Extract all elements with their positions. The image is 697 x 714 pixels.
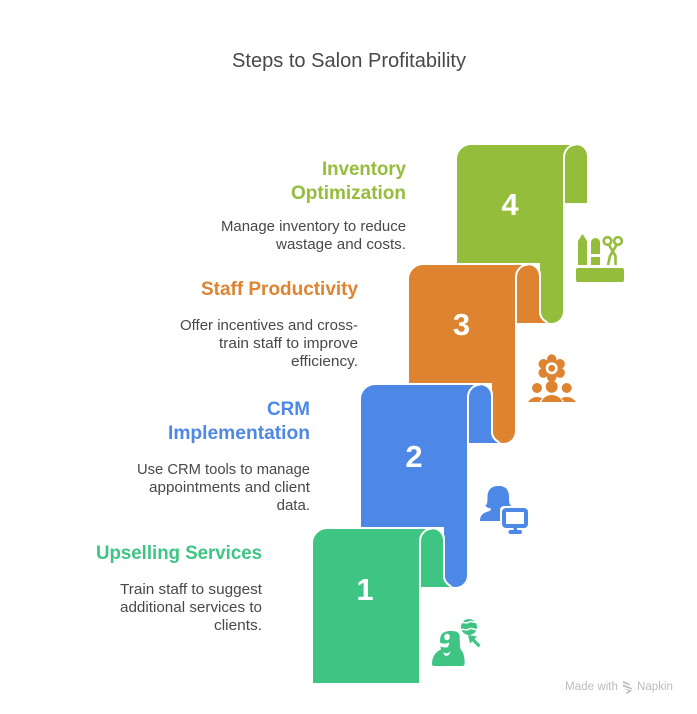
text: inventory description: Manage inventory to reduce — [221, 218, 406, 235]
panel: step 4 ribbon: 4 — [501, 187, 519, 222]
heading: upselling services: Upselling Services — [96, 542, 262, 564]
panel: step 1 ribbon — [313, 528, 451, 683]
text: staff description — [180, 317, 358, 370]
watermark: made with napkin — [565, 681, 673, 694]
panel: step 3 ribbon — [409, 264, 547, 443]
text: inventory description — [221, 218, 406, 253]
text: crm description — [137, 461, 311, 514]
text: crm description: data. — [277, 497, 310, 514]
icon: tools in a holder — [576, 234, 624, 282]
text: staff description: Offer incentives and cross- — [180, 317, 358, 334]
title: Steps to Salon Profitability — [232, 50, 466, 72]
icon: person with balloon and cursor — [432, 619, 480, 666]
panel: step 3 ribbon: 3 — [453, 307, 470, 342]
text: upselling description — [120, 581, 263, 634]
panel: step 2 ribbon: 2 — [405, 439, 423, 474]
panel: step 2 ribbon — [361, 384, 499, 587]
heading: crm implementation: Implementation — [168, 422, 310, 444]
heading: inventory optimization: Inventory — [322, 158, 406, 180]
icon: flower above team — [528, 354, 576, 402]
panel: step 1 ribbon: 1 — [356, 572, 374, 607]
text: upselling description: additional services to — [120, 599, 262, 616]
watermark: made with napkin: Made with — [565, 681, 618, 693]
icon: person with monitor — [480, 486, 530, 534]
text: crm description: appointments and client — [149, 479, 311, 496]
heading: inventory optimization: Optimization — [291, 182, 406, 204]
text: upselling description: Train staff to suggest — [120, 581, 263, 598]
panel: step 4 ribbon — [457, 144, 587, 323]
text: staff description: efficiency. — [291, 353, 358, 370]
text: staff description: train staff to improve — [219, 335, 358, 352]
heading: crm implementation: CRM — [267, 398, 310, 420]
text: crm description: Use CRM tools to manage — [137, 461, 310, 478]
heading: staff productivity: Staff Productivity — [201, 278, 358, 300]
text: upselling description: clients. — [214, 617, 262, 634]
heading: crm implementation — [168, 398, 310, 444]
text: inventory description: wastage and costs. — [275, 236, 406, 253]
heading: inventory optimization — [291, 158, 406, 204]
watermark: made with napkin: Napkin — [637, 681, 673, 693]
